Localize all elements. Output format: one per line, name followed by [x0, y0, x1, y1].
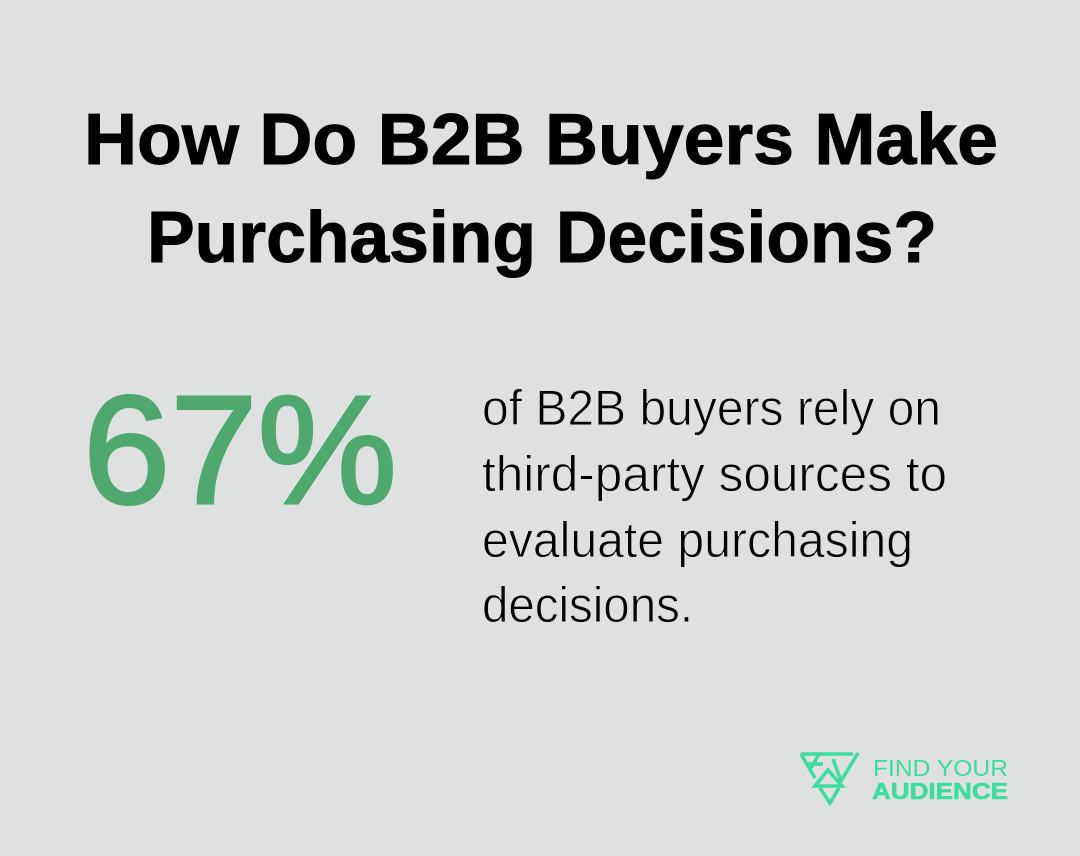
title	[84, 100, 998, 278]
logo icon	[801, 753, 858, 803]
statistic description: of B2B buyers rely on	[482, 380, 941, 436]
statistic description	[482, 380, 947, 633]
logo wordmark: AUDIENCE	[872, 778, 1008, 804]
logo wordmark	[872, 755, 1008, 804]
title: How Do B2B Buyers Make	[84, 100, 998, 180]
big statistic: 67%: 67%	[83, 364, 397, 536]
statistic description: decisions.	[482, 577, 693, 633]
logo wordmark: FIND YOUR	[873, 755, 1008, 781]
statistic description: evaluate purchasing	[482, 512, 913, 568]
statistic description: third-party sources to	[482, 446, 947, 502]
logo: Find Your Audience	[801, 753, 1008, 804]
title: Purchasing Decisions?	[147, 198, 937, 278]
